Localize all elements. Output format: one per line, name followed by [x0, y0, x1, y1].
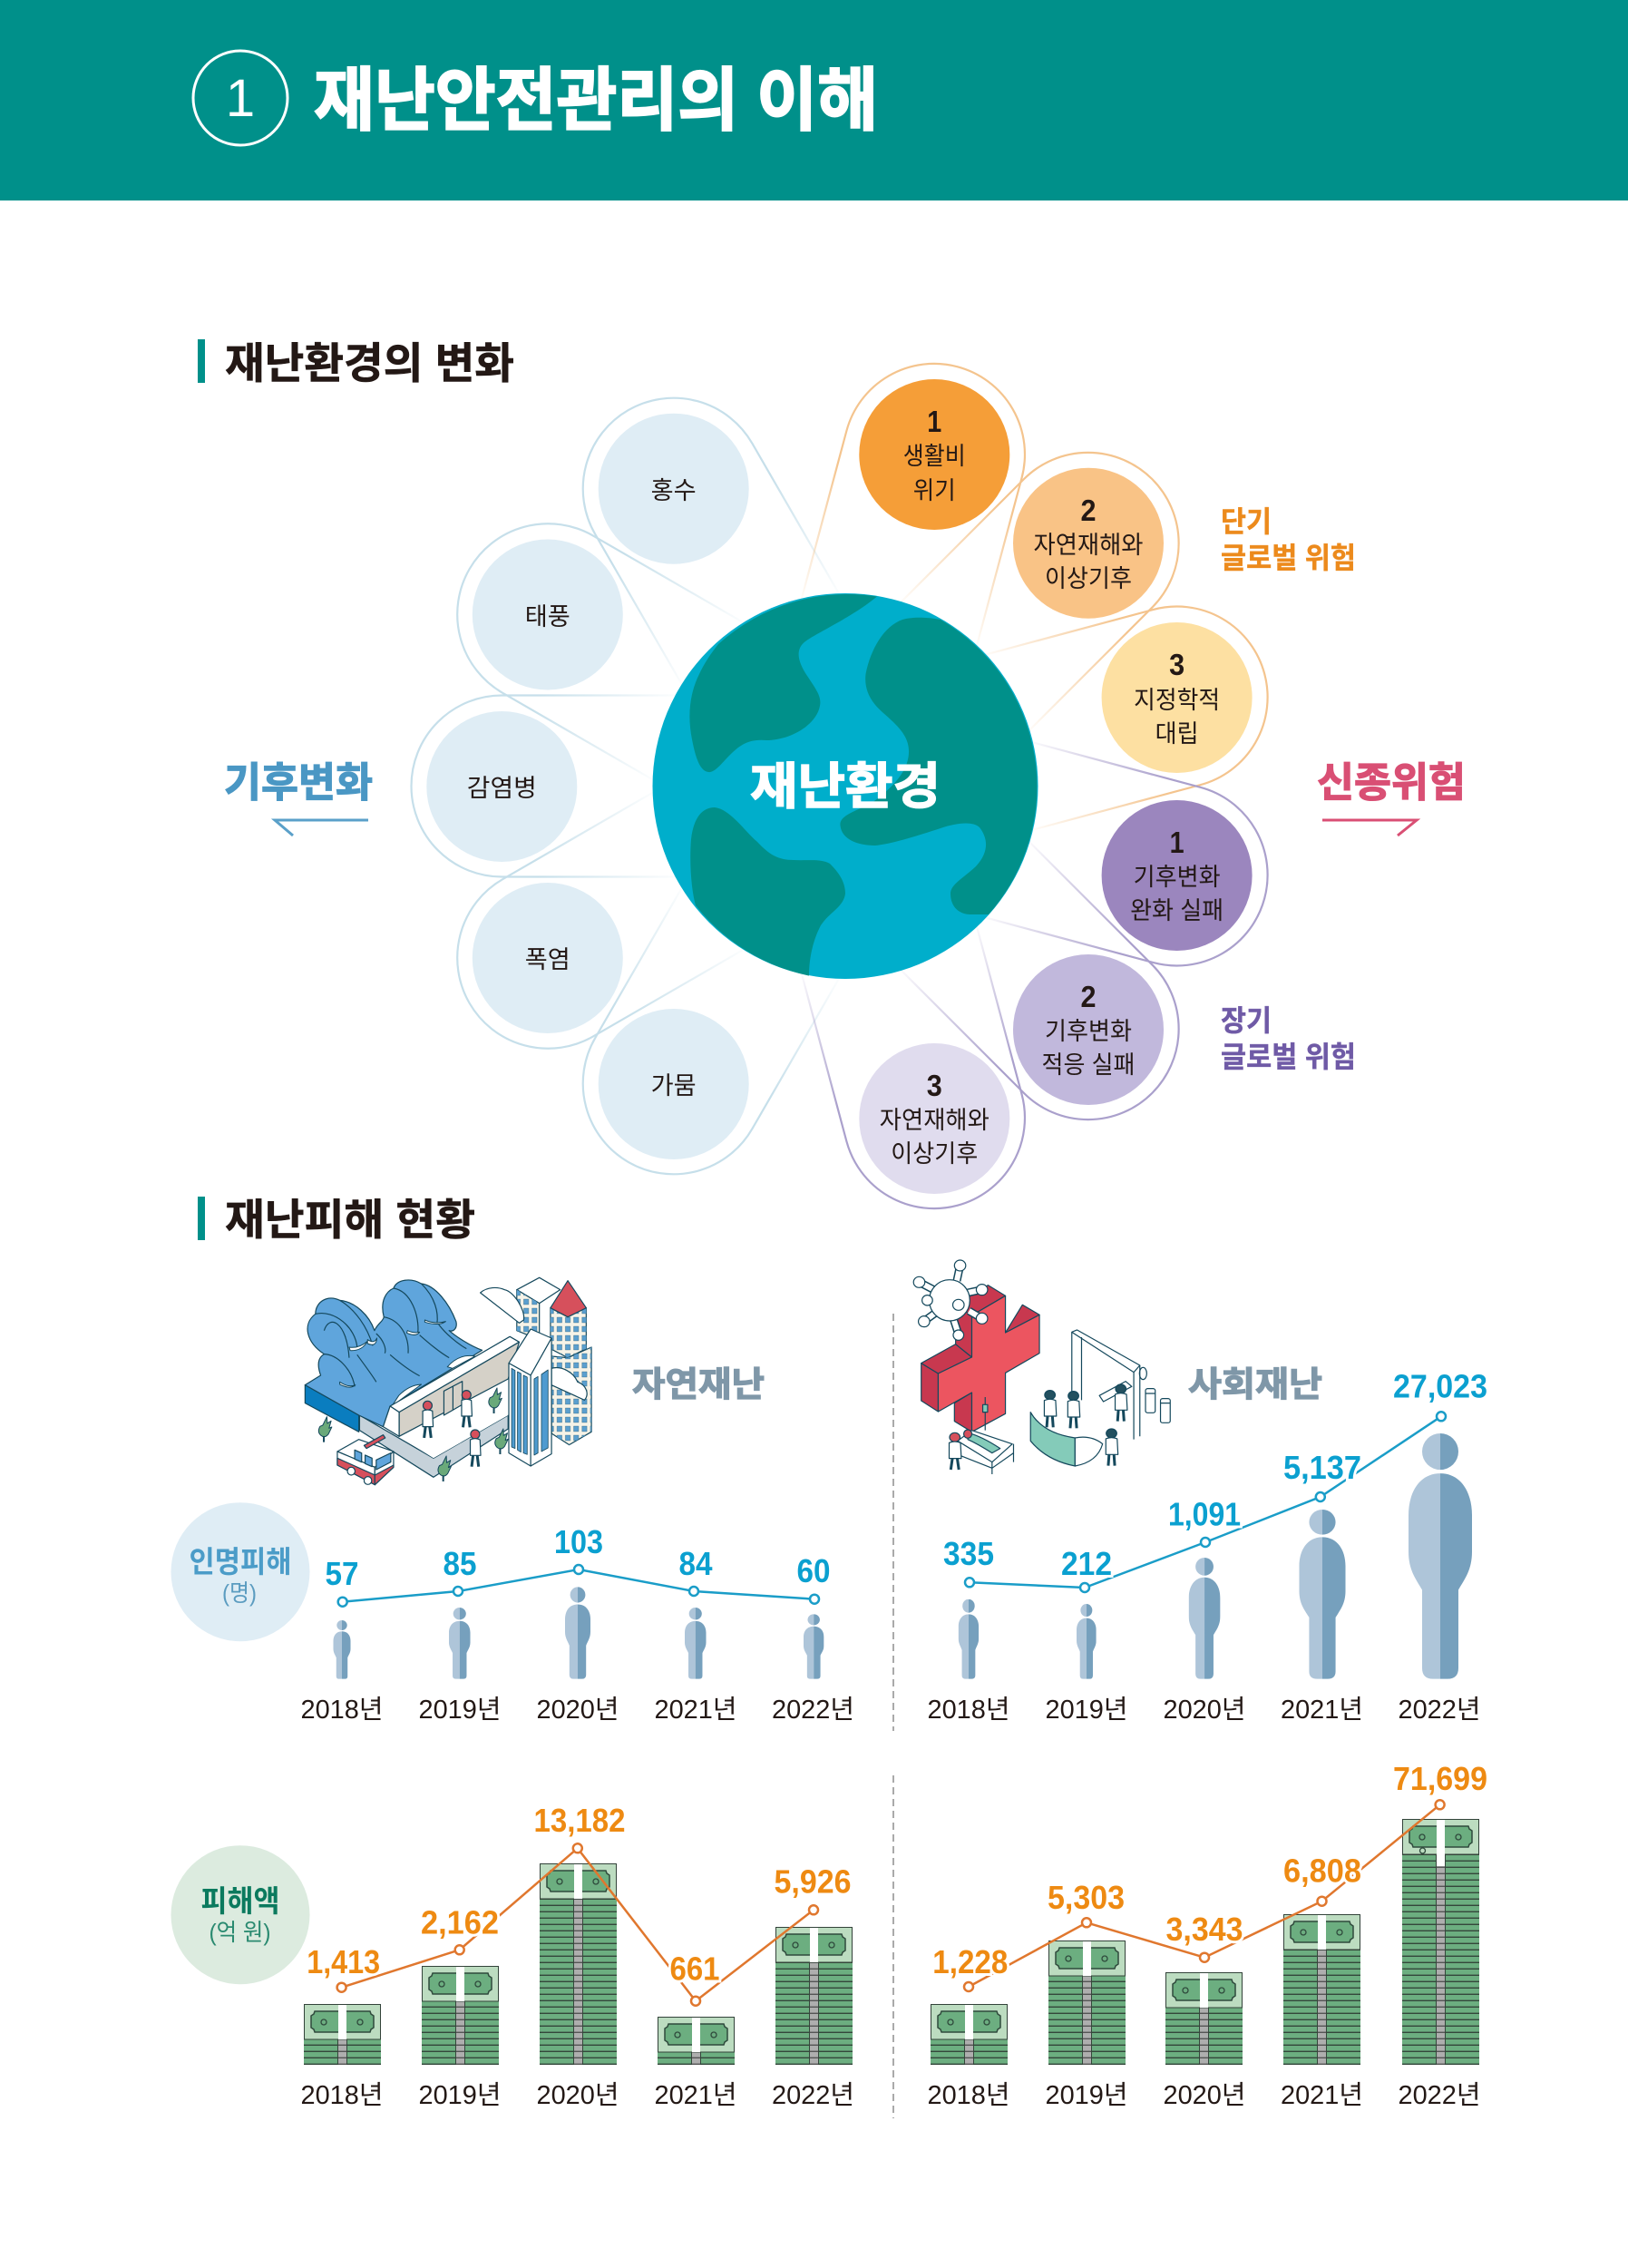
diagram: disaster environment flower	[412, 343, 1288, 1229]
value labels: 57	[325, 1555, 359, 1592]
label: short-term global risks: 단기	[1221, 505, 1272, 538]
circle: long-term risk 3: 이상기후	[891, 1140, 978, 1168]
value labels	[943, 1368, 1487, 1582]
circle: long-term risk 2: 기후변화	[1045, 1018, 1132, 1045]
year axis: 2020년	[1163, 2081, 1246, 2110]
circle: long-term risk 1: 1	[1170, 826, 1184, 859]
ambulance	[337, 1435, 394, 1485]
label: short-term global risks: 글로벌 위험	[1221, 542, 1356, 574]
mask	[1030, 1413, 1103, 1466]
circle: long-term risk 1: 기후변화	[1134, 864, 1221, 891]
circle: long-term risk 2: 적응 실패	[1041, 1051, 1136, 1079]
value labels	[325, 1523, 831, 1592]
circle: short-term risk 1: 위기	[913, 477, 956, 504]
value labels: 335	[943, 1535, 994, 1572]
badge: damage amount: (억 원)	[209, 1919, 270, 1946]
label: emerging risks with arrow: 신종위험	[1317, 759, 1466, 806]
value labels: 661	[669, 1950, 720, 1988]
year axis	[927, 2081, 1480, 2110]
front tower building	[509, 1329, 551, 1466]
year axis: 2022년	[772, 1696, 854, 1725]
value labels: 84	[678, 1545, 713, 1582]
circle: heatwave	[473, 883, 623, 1033]
circle: short-term risk 3: 3	[1169, 648, 1184, 681]
money stacks	[304, 1863, 853, 2065]
badge: casualties: (명)	[222, 1579, 257, 1607]
value labels: 27,023	[1393, 1368, 1487, 1405]
vaccine vials	[1145, 1389, 1170, 1422]
title: 재난안전관리의 이해	[314, 63, 878, 140]
back tower buildings	[481, 1277, 591, 1445]
person icons	[959, 1433, 1472, 1679]
circle: typhoon	[473, 539, 623, 689]
year axis: 2022년	[1399, 2081, 1480, 2110]
trend line	[964, 1800, 1445, 1991]
heading: changes in disaster environment: 재난환경의 변화	[225, 339, 514, 387]
year axis: 2018년	[927, 2081, 1010, 2110]
person icons	[334, 1587, 824, 1679]
value labels: 1,413	[307, 1943, 380, 1980]
circle: long-term risk 2: 2	[1081, 980, 1096, 1013]
chapter number badge: 1	[226, 69, 255, 128]
circle: flood: 홍수	[651, 477, 697, 504]
illustration: natural disaster tsunami and city	[305, 1277, 591, 1485]
chart: social disaster damage	[927, 1760, 1487, 2110]
value labels: 5,926	[775, 1863, 851, 1901]
circle: short-term risk 1: 1	[927, 405, 941, 438]
circle: short-term risk 3: 지정학적	[1134, 687, 1220, 714]
circle: typhoon: 태풍	[525, 603, 570, 631]
badge: casualties	[171, 1502, 310, 1641]
value labels: 60	[796, 1552, 831, 1589]
year axis: 2018년	[301, 2081, 383, 2110]
year axis: 2021년	[1281, 2081, 1363, 2110]
value labels: 2,162	[421, 1904, 499, 1941]
circle: short-term risk 1: 생활비	[903, 443, 966, 470]
circle: short-term risk 2: 이상기후	[1045, 565, 1132, 592]
circle: long-term risk 1: 완화 실패	[1130, 897, 1223, 924]
value labels: 103	[554, 1523, 603, 1560]
trend line	[965, 1412, 1446, 1592]
illustration: social disaster cross and virus	[913, 1260, 1170, 1474]
circle: long-term risk 3	[859, 1043, 1009, 1194]
circle: short-term risk 2: 자연재해와	[1034, 532, 1143, 559]
year axis: 2018년	[301, 1696, 383, 1725]
header band	[0, 0, 1628, 200]
circle: short-term risk 2	[1013, 468, 1164, 619]
year axis: 2019년	[1045, 1696, 1128, 1725]
petal outlines: long-term risks	[802, 742, 1288, 1229]
label: climate change with arrow	[224, 759, 373, 836]
badge: casualties: 인명피해	[189, 1545, 292, 1579]
value labels	[932, 1760, 1487, 1980]
value labels: 212	[1061, 1545, 1112, 1582]
circle: long-term risk 2	[1013, 954, 1164, 1105]
year axis: 2020년	[537, 1696, 619, 1725]
circle: short-term risk 2: 2	[1081, 494, 1096, 527]
label: short-term global risks	[1221, 505, 1356, 574]
petal outlines: climate change	[412, 365, 839, 1207]
petal outlines: short-term risks	[802, 343, 1288, 830]
year axis: 2018년	[927, 1696, 1010, 1725]
circle: short-term risk 3	[1102, 622, 1253, 773]
label: long-term global risks: 글로벌 위험	[1221, 1041, 1356, 1073]
chart: natural disaster casualties	[301, 1523, 854, 1725]
label: long-term global risks	[1221, 1004, 1356, 1073]
circle: long-term risk 3: 자연재해와	[880, 1107, 989, 1134]
circle: flood	[599, 414, 749, 564]
year axis	[301, 1696, 854, 1725]
circle: epidemic: 감염병	[467, 775, 537, 802]
badge: damage amount: 피해액	[201, 1884, 279, 1918]
value labels: 3,343	[1166, 1911, 1243, 1948]
value labels: 85	[443, 1545, 477, 1582]
circle: epidemic	[426, 711, 577, 862]
label: climate change with arrow: 기후변화	[224, 759, 373, 806]
badge: damage amount	[171, 1845, 310, 1984]
label: emerging risks with arrow	[1317, 759, 1466, 836]
circle: short-term risk 3: 대립	[1155, 720, 1199, 748]
heading: disaster damage status: 재난피해 현황	[225, 1196, 475, 1244]
value labels: 6,808	[1283, 1852, 1361, 1889]
virus	[913, 1260, 988, 1340]
year axis: 2019년	[419, 1696, 501, 1725]
value labels: 1,091	[1168, 1496, 1241, 1533]
year axis: 2020년	[1163, 1696, 1246, 1725]
circle: long-term risk 3: 3	[927, 1069, 942, 1102]
year axis: 2022년	[1399, 1696, 1480, 1725]
value labels: 71,699	[1393, 1760, 1487, 1797]
value labels: 13,182	[533, 1802, 626, 1839]
trend line	[337, 1843, 818, 2006]
heading: social disasters: 사회재난	[1188, 1366, 1322, 1404]
vaccine frame	[1072, 1330, 1146, 1440]
globe	[653, 593, 1038, 979]
year axis: 2019년	[1045, 2081, 1128, 2110]
label: long-term global risks: 장기	[1221, 1004, 1272, 1037]
year axis: 2021년	[655, 1696, 736, 1725]
value labels: 1,228	[932, 1943, 1008, 1980]
year axis	[301, 2081, 854, 2110]
year axis: 2020년	[537, 2081, 619, 2110]
year axis	[927, 1696, 1480, 1725]
circle: drought: 가뭄	[651, 1072, 697, 1100]
year axis: 2019년	[419, 2081, 501, 2110]
year axis: 2021년	[1281, 1696, 1363, 1725]
heading: natural disasters: 자연재난	[632, 1366, 765, 1404]
globe label: 재난환경	[750, 758, 941, 815]
year axis: 2021년	[655, 2081, 736, 2110]
trend line	[338, 1565, 819, 1607]
circle: heatwave: 폭염	[525, 946, 570, 973]
circle: drought	[599, 1009, 749, 1159]
circle: short-term risk 1	[859, 379, 1009, 530]
chart: natural disaster damage	[301, 1802, 854, 2110]
hospital bed with patient	[950, 1397, 1013, 1474]
divider dashes	[892, 1314, 894, 2118]
value labels: 5,137	[1283, 1449, 1361, 1486]
circle: long-term risk 1	[1102, 800, 1253, 951]
money stacks	[931, 1820, 1479, 2065]
value labels	[307, 1802, 851, 1988]
chart: social disaster casualties	[927, 1368, 1487, 1725]
value labels: 5,303	[1048, 1879, 1125, 1916]
year axis: 2022년	[772, 2081, 854, 2110]
chapter number badge	[193, 51, 288, 145]
